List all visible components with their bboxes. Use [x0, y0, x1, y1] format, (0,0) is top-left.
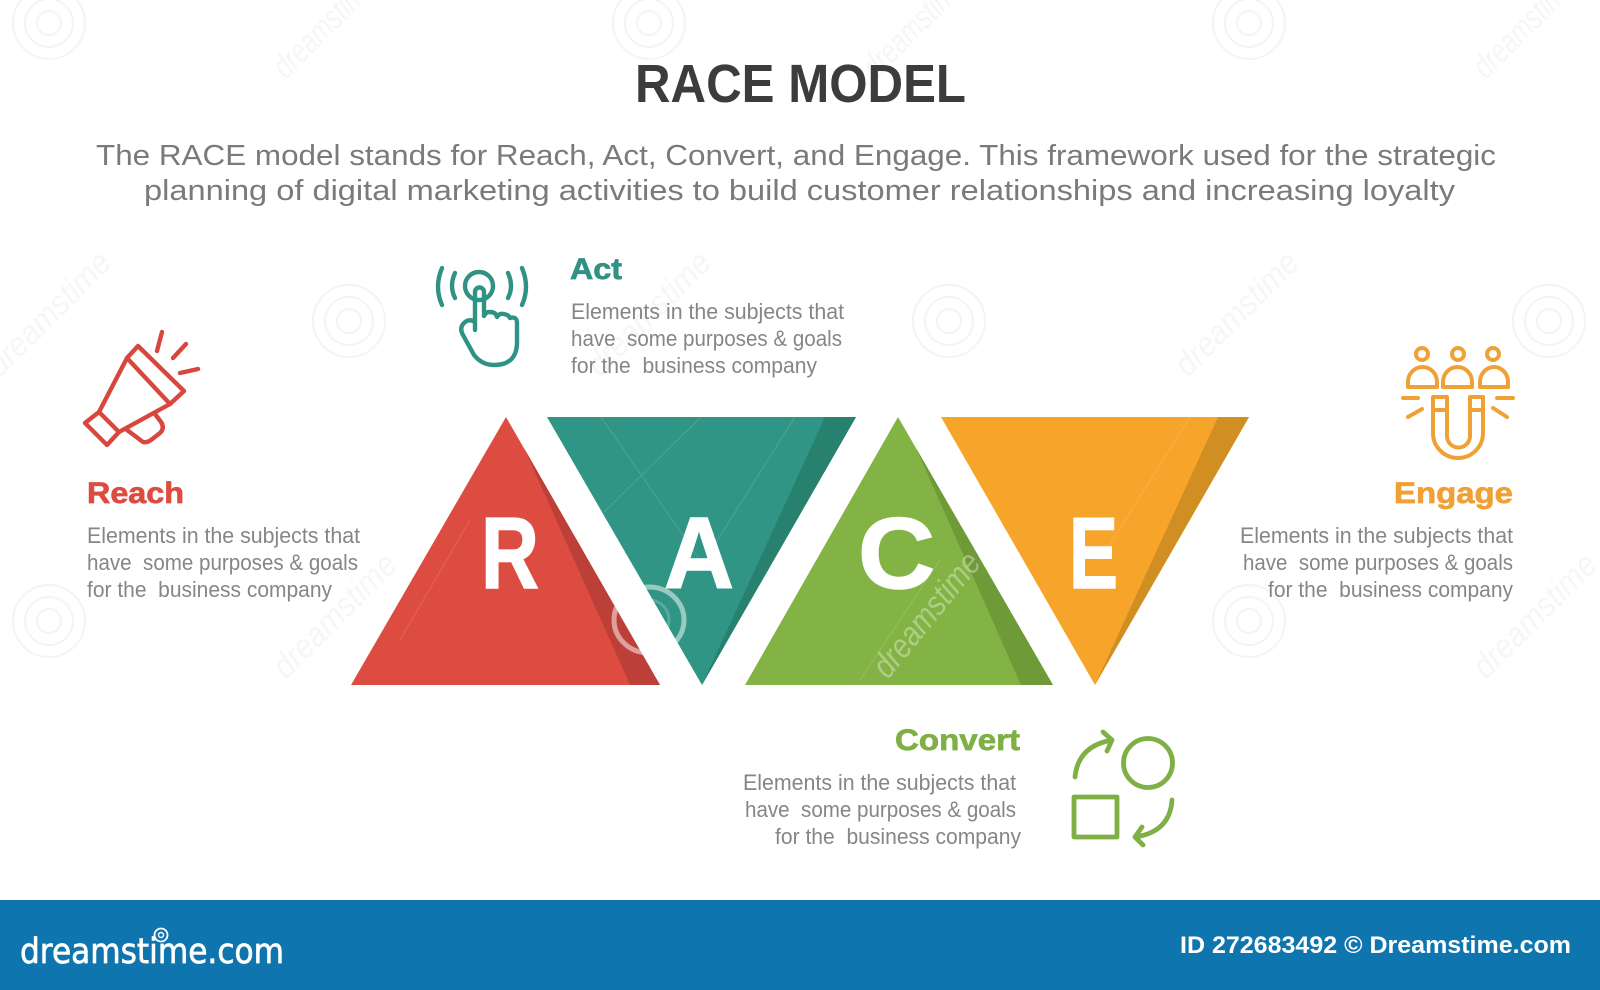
- text: engage description: Elements in the subjects that: [1240, 523, 1513, 548]
- background watermark spirals: [13, 0, 1585, 657]
- triangle R: R: [481, 498, 539, 610]
- footer bar: [0, 900, 1600, 990]
- subtitle text block: planning of digital marketing activities to build customer relationships and increasing loyalty: [144, 175, 1456, 207]
- text: act description: Elements in the subjects that: [571, 299, 844, 324]
- heading: engage: Engage: [1394, 477, 1513, 510]
- heading: act: Act: [570, 253, 622, 286]
- text: reach description: Elements in the subjects that: [87, 523, 360, 548]
- triangle C: C: [858, 498, 935, 610]
- watermark over triangles: dreamstime: [865, 545, 989, 685]
- text: convert description: [743, 770, 1021, 849]
- panel: engage: [1240, 348, 1513, 602]
- text: act description: [571, 299, 844, 378]
- triangle R: [351, 417, 660, 685]
- background watermark wordmarks: [0, 0, 1600, 686]
- panel: convert: [743, 724, 1172, 849]
- text: act description: have some purposes & goals: [571, 326, 842, 351]
- chart: RACE triangles: [351, 417, 1249, 685]
- triangle C: [745, 417, 1053, 685]
- triangle E: E: [1069, 498, 1118, 610]
- triangle A: [547, 417, 856, 685]
- background watermark wordmarks: dreamstime: [1167, 244, 1307, 384]
- text: reach description: for the business company: [87, 577, 332, 602]
- title: RACE MODEL: [635, 54, 966, 114]
- panel: act: [438, 253, 844, 378]
- text: convert description: for the business company: [775, 824, 1021, 849]
- text: engage description: have some purposes & goals: [1243, 550, 1513, 575]
- text: engage description: for the business company: [1268, 577, 1513, 602]
- panel: reach: [85, 332, 360, 602]
- icon: convert cycle: [1074, 732, 1172, 845]
- text: reach description: have some purposes & goals: [87, 550, 358, 575]
- text: convert description: Elements in the subjects that: [743, 770, 1016, 795]
- logo: dreamstime: dreamstime.com: [20, 932, 284, 972]
- text: act description: for the business company: [571, 353, 817, 378]
- text: engage description: [1240, 523, 1513, 602]
- triangle A: A: [664, 498, 734, 610]
- icon: megaphone: [85, 332, 198, 445]
- watermark over triangles: [400, 417, 1190, 685]
- image id credit: ID 272683492 © Dreamstime.com: [1180, 932, 1571, 959]
- background watermark wordmarks: dreamstime: [265, 546, 405, 686]
- text: convert description: have some purposes & goals: [745, 797, 1016, 822]
- subtitle text block: [96, 140, 1496, 207]
- triangle E: [941, 417, 1249, 685]
- icon: magnet and people: [1403, 348, 1513, 458]
- text: reach description: [87, 523, 360, 602]
- heading: reach: Reach: [87, 477, 184, 510]
- heading: convert: Convert: [895, 724, 1020, 757]
- subtitle text block: The RACE model stands for Reach, Act, Convert, and Engage. This framework used for the strategic: [96, 140, 1496, 172]
- background watermark wordmarks: dreamstime: [579, 244, 719, 384]
- icon: pointing hand: [438, 268, 526, 365]
